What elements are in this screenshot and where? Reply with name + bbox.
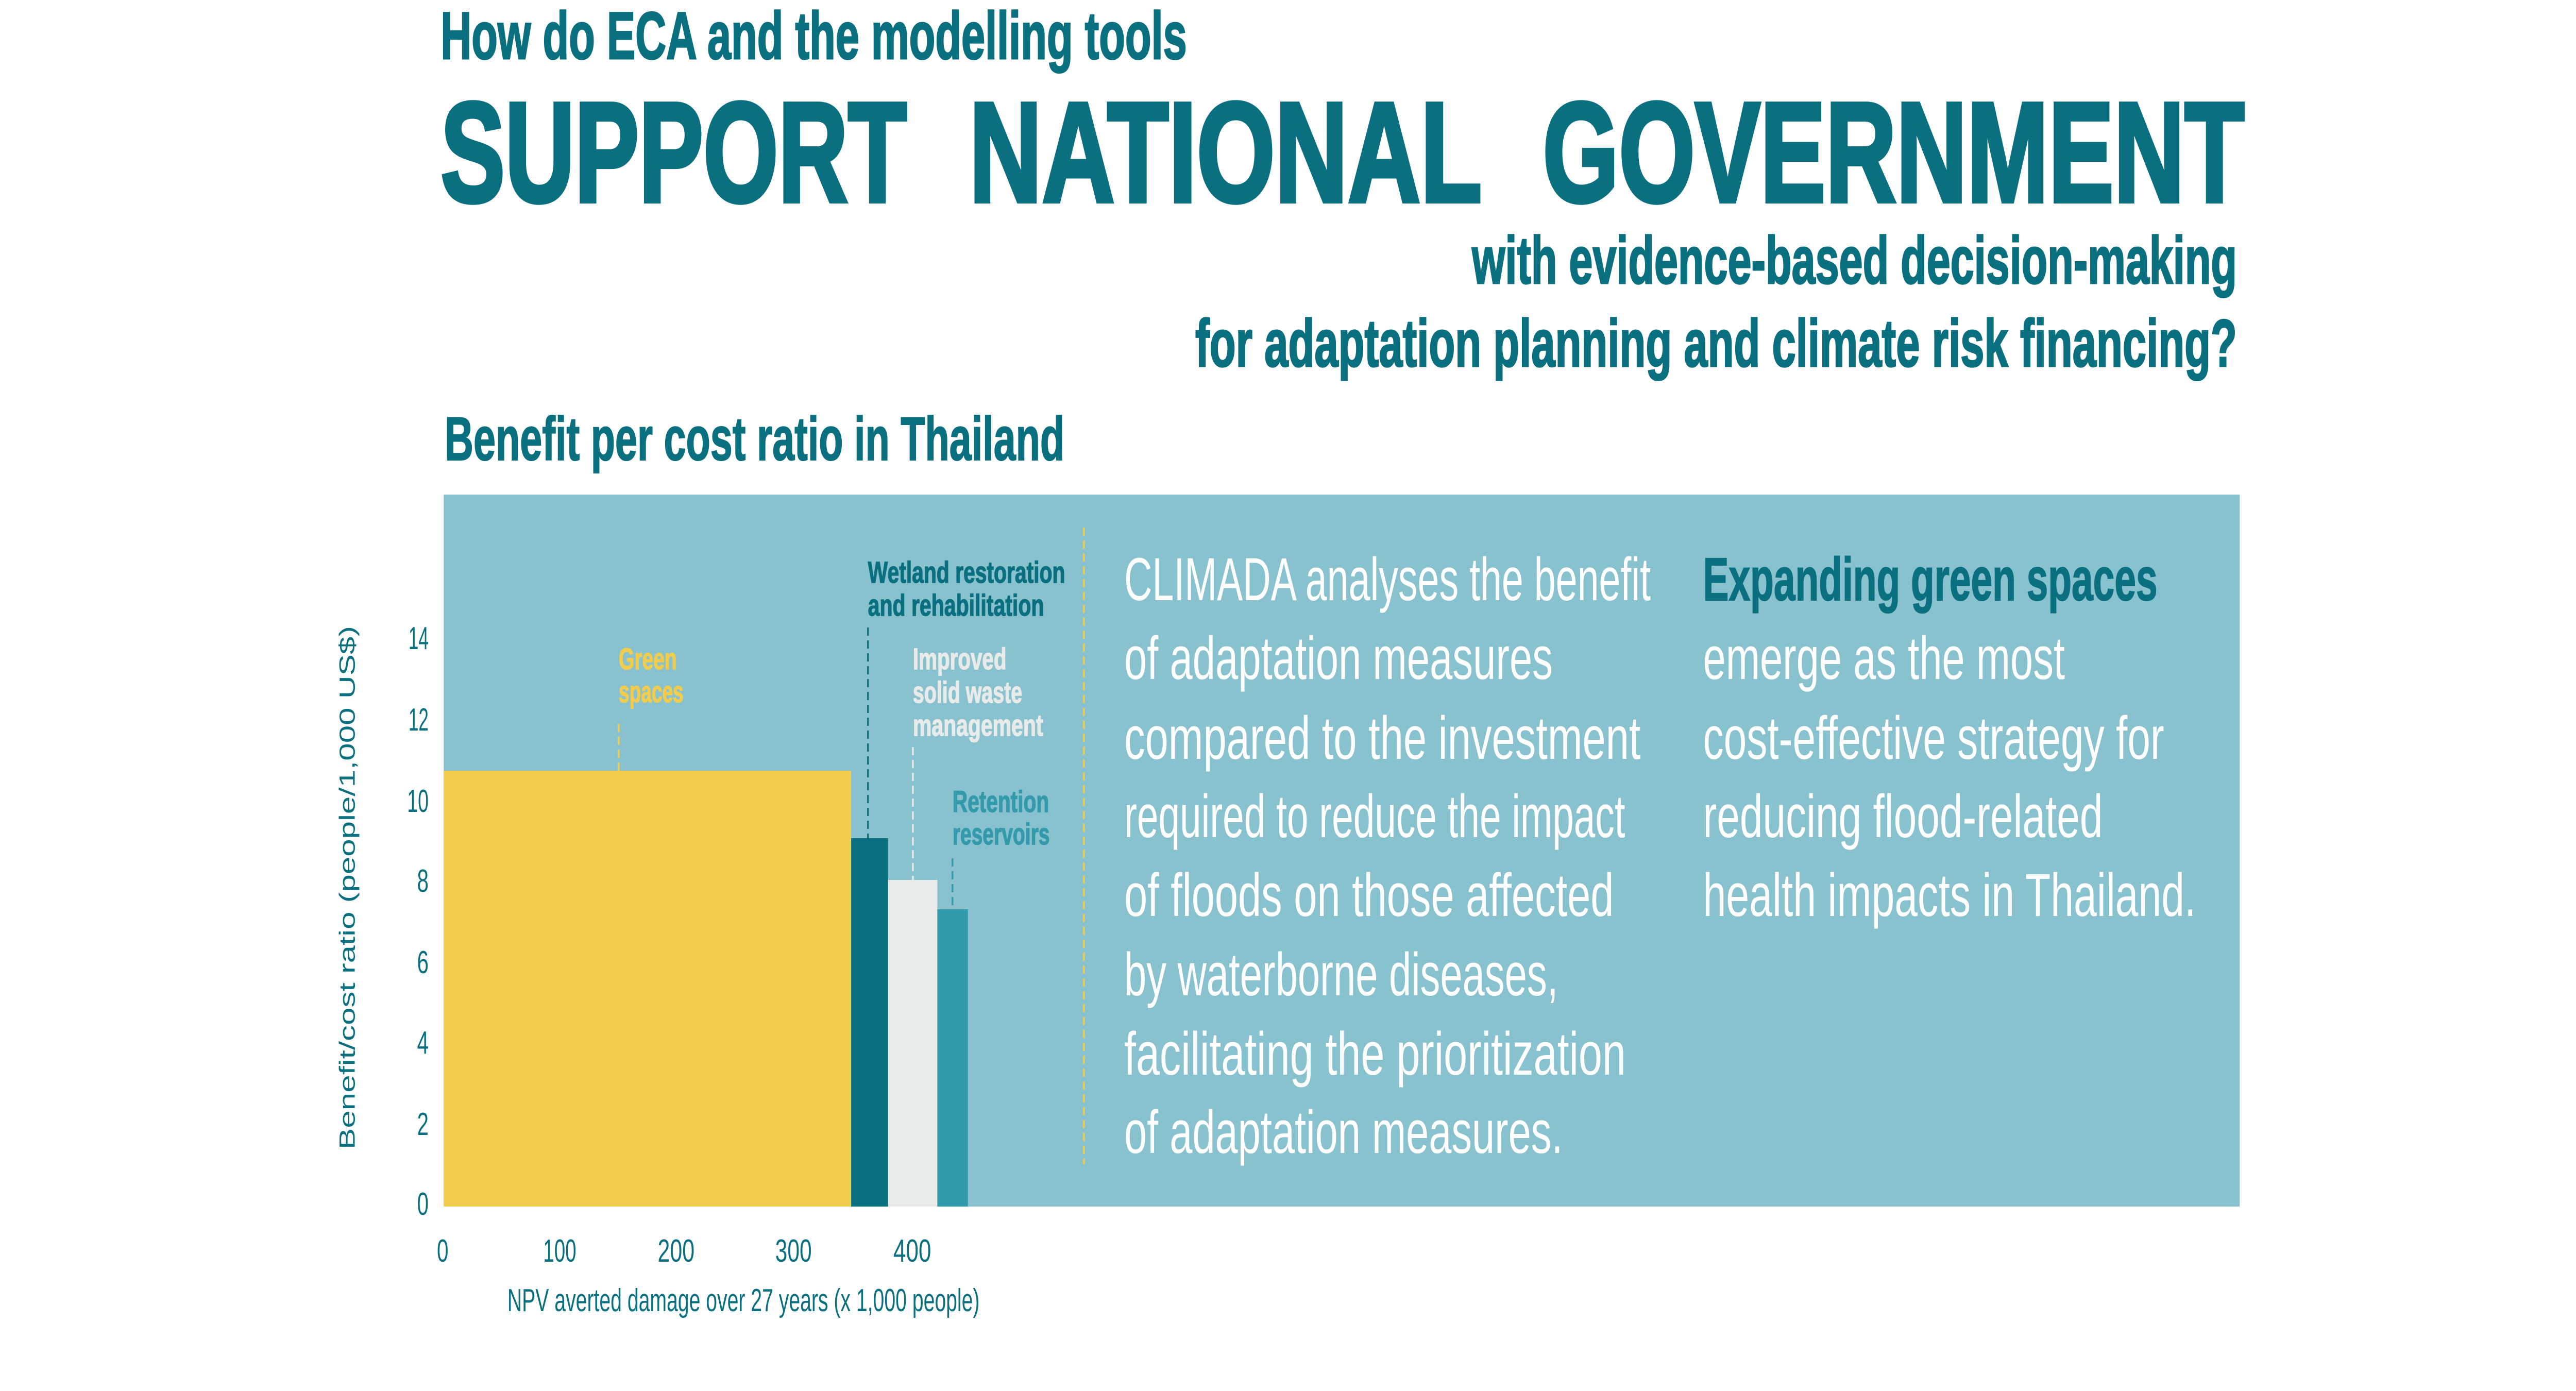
- callout: wetland restoration and rehabilitation: Wetland restoration: [868, 556, 1065, 589]
- text block: CLIMADA explanation: required to reduce the impact: [1124, 783, 1625, 851]
- callout: improved solid waste management: [913, 643, 1043, 880]
- text block: key finding on green spaces: emerge as the most: [1703, 625, 2065, 692]
- x axis tick labels: 200: [658, 1233, 694, 1269]
- x axis tick labels: 0: [437, 1233, 448, 1269]
- y axis title: Benefit/cost ratio (people/1,000 US$): [335, 626, 360, 1149]
- title line: main headline: SUPPORT: [440, 73, 907, 232]
- text block: CLIMADA explanation: facilitating the prioritization: [1124, 1021, 1626, 1088]
- x axis tick labels: 100: [543, 1233, 577, 1269]
- text block: CLIMADA explanation: CLIMADA analyses the benefit: [1124, 546, 1651, 614]
- text block: key finding on green spaces: Expanding green spaces: [1703, 546, 2158, 614]
- text block: CLIMADA explanation: of floods on those affected: [1124, 862, 1614, 929]
- panel: light teal background: [444, 495, 2240, 1207]
- x axis title: NPV averted damage over 27 years (x 1,000 people): [507, 1283, 979, 1318]
- title block: [440, 0, 2244, 381]
- title line: main headline: NATIONAL: [969, 73, 1482, 232]
- text block: key finding on green spaces: health impacts in Thailand.: [1703, 862, 2196, 929]
- y axis tick labels: 14: [409, 621, 429, 656]
- title line: adaptation planning: for adaptation planning and climate risk financing?: [1195, 307, 2237, 381]
- callout: retention reservoirs: reservoirs: [953, 818, 1049, 851]
- callout: green spaces: Green: [619, 643, 677, 676]
- text block: key finding on green spaces: cost-effective strategy for: [1703, 705, 2164, 772]
- y axis tick labels: 0: [417, 1186, 429, 1222]
- y axis tick labels: 6: [417, 945, 429, 980]
- callout: green spaces: [619, 643, 684, 771]
- title line: intro question: How do ECA and the modelling tools: [440, 0, 1187, 73]
- section heading: Benefit per cost ratio in Thailand: [445, 404, 1064, 473]
- text block: CLIMADA explanation: of adaptation measures: [1124, 625, 1553, 692]
- callout: improved solid waste management: Improved: [913, 643, 1007, 676]
- x axis tick labels: 400: [893, 1233, 931, 1269]
- text block: key finding on green spaces: reducing flood-related: [1703, 783, 2103, 851]
- y axis tick labels: 12: [409, 702, 429, 738]
- bar: green spaces: [444, 771, 851, 1207]
- callout: retention reservoirs: Retention: [953, 786, 1049, 819]
- title line: main headline: GOVERNMENT: [1543, 73, 2244, 232]
- text block: CLIMADA explanation: compared to the investment: [1124, 705, 1640, 772]
- text block: key finding on green spaces: [1703, 546, 2196, 929]
- bar: retention reservoirs: [937, 909, 968, 1207]
- callout: retention reservoirs: [953, 786, 1049, 909]
- y axis tick labels: 2: [417, 1107, 429, 1142]
- callout: green spaces: spaces: [619, 676, 684, 709]
- y axis tick labels: 8: [417, 863, 429, 899]
- text block: CLIMADA explanation: of adaptation measures.: [1124, 1099, 1563, 1166]
- x axis tick labels: 300: [775, 1233, 812, 1269]
- y axis tick labels: 4: [417, 1025, 429, 1061]
- callout: improved solid waste management: solid waste: [913, 676, 1022, 709]
- y axis tick labels: 10: [407, 784, 429, 819]
- bar: wetland restoration: [851, 838, 888, 1207]
- callout: wetland restoration and rehabilitation: and rehabilitation: [868, 589, 1044, 622]
- x axis tick labels: [437, 1233, 931, 1269]
- bar chart: [335, 556, 1065, 1318]
- title line: evidence-based decision-making: with evidence-based decision-making: [1471, 224, 2237, 298]
- title line: main headline: [440, 73, 2244, 232]
- callout: improved solid waste management: management: [913, 709, 1043, 742]
- text block: CLIMADA explanation: by waterborne diseases,: [1124, 941, 1558, 1009]
- y axis tick labels: [407, 621, 429, 1222]
- callout: wetland restoration and rehabilitation: [868, 556, 1065, 838]
- bar: improved solid waste management: [888, 880, 937, 1207]
- text block: CLIMADA explanation: [1124, 546, 1651, 1166]
